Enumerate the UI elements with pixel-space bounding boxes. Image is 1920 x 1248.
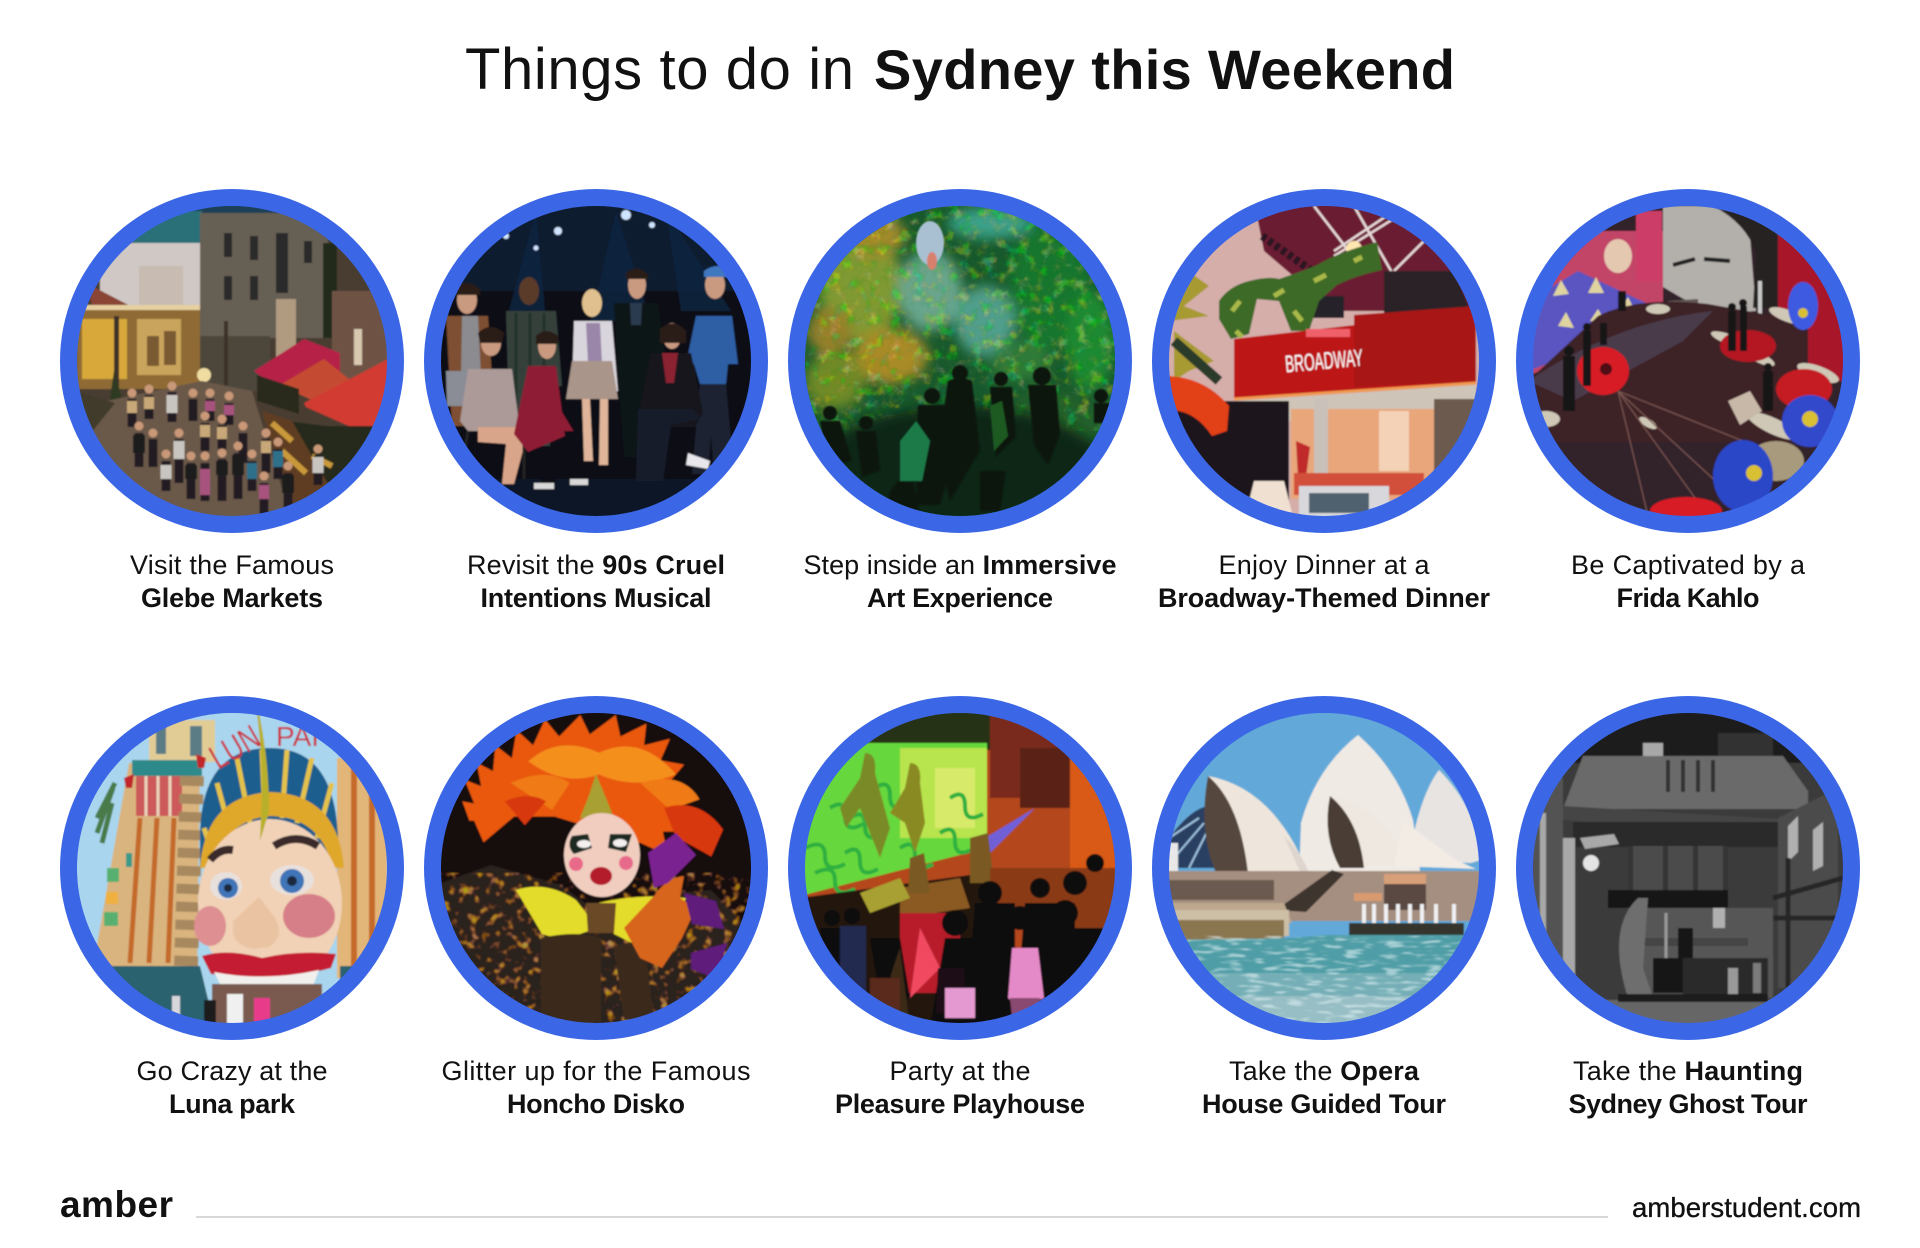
panel: Frida Kahlo <box>1516 189 1860 613</box>
footer: amber logo: amber <box>60 1184 173 1225</box>
sign lettering: LUN <box>203 718 267 777</box>
photo: cast on stage <box>436 201 756 521</box>
photo: abandoned industrial hall in black and white <box>1528 708 1848 1028</box>
caption: House Guided Tour <box>1202 1089 1446 1119</box>
blue ring <box>788 189 1132 533</box>
caption: Pleasure Playhouse <box>835 1089 1085 1119</box>
panel: Immersive Art Experience <box>788 189 1132 613</box>
blue ring <box>1152 189 1496 533</box>
footer: website: amberstudent.com <box>1632 1192 1861 1223</box>
caption: Sydney Ghost Tour <box>1568 1089 1808 1119</box>
blue ring <box>1516 189 1860 533</box>
caption: Frida Kahlo <box>1616 583 1760 613</box>
caption <box>804 550 1116 613</box>
sign lettering: PAI <box>276 721 319 752</box>
caption: Take the Haunting <box>1573 1056 1803 1086</box>
caption <box>1571 550 1806 613</box>
caption: Glitter up for the Famous <box>442 1056 750 1086</box>
panel: Honcho Disko <box>424 696 768 1119</box>
caption <box>1202 1056 1446 1119</box>
caption: Intentions Musical <box>480 583 712 613</box>
caption: Art Experience <box>867 583 1053 613</box>
photo: Sydney Opera House <box>1164 708 1484 1028</box>
photo: Broadway restaurant front <box>1162 201 1484 521</box>
photo: immersive garden projection <box>805 206 1115 516</box>
caption: Party at the <box>890 1056 1030 1086</box>
blue ring <box>60 696 404 1040</box>
caption: Visit the Famous <box>130 550 334 580</box>
photo: night market street <box>72 201 392 526</box>
panel: Broadway-Themed Dinner <box>1152 189 1496 613</box>
caption: Honcho Disko <box>507 1089 685 1119</box>
caption: Be Captivated by a <box>1571 550 1806 580</box>
caption <box>467 550 725 613</box>
caption: Luna park <box>169 1089 296 1119</box>
caption <box>442 1056 750 1119</box>
title <box>465 37 1455 102</box>
blue ring <box>60 189 404 533</box>
blue ring <box>424 189 768 533</box>
panel: Pleasure Playhouse <box>788 696 1132 1119</box>
blue ring <box>1516 696 1860 1040</box>
panel: Sydney Ghost Tour <box>1516 696 1860 1119</box>
caption <box>136 1056 328 1119</box>
caption: Glebe Markets <box>141 583 323 613</box>
caption: Broadway-Themed Dinner <box>1158 583 1490 613</box>
caption: Go Crazy at the <box>136 1056 328 1086</box>
blue ring <box>1152 696 1496 1040</box>
panel: Cruel Intentions Musical <box>424 189 768 613</box>
photo: DJ party with green screen <box>800 708 1120 1028</box>
panel: Opera House <box>1152 696 1496 1119</box>
blue ring <box>424 696 768 1040</box>
caption <box>1568 1056 1808 1119</box>
photo: immersive Frida Kahlo projection <box>1528 201 1848 525</box>
caption <box>130 550 334 613</box>
blue ring <box>788 696 1132 1040</box>
caption <box>1158 550 1490 613</box>
panel: Luna Park <box>60 696 404 1119</box>
caption: Enjoy Dinner at a <box>1218 550 1430 580</box>
title: Things to do in <box>465 37 854 102</box>
caption: Revisit the 90s Cruel <box>467 550 725 580</box>
caption: Take the Opera <box>1229 1056 1420 1086</box>
panel: Glebe Markets <box>60 189 404 613</box>
photo: drag performer in orange wig <box>436 708 756 1030</box>
title: Sydney this Weekend <box>874 38 1455 101</box>
caption: Step inside an Immersive <box>804 550 1116 580</box>
caption <box>835 1056 1085 1119</box>
photo: Luna Park face entrance <box>72 708 392 1028</box>
sign lettering: BROADWAY <box>1284 345 1364 378</box>
